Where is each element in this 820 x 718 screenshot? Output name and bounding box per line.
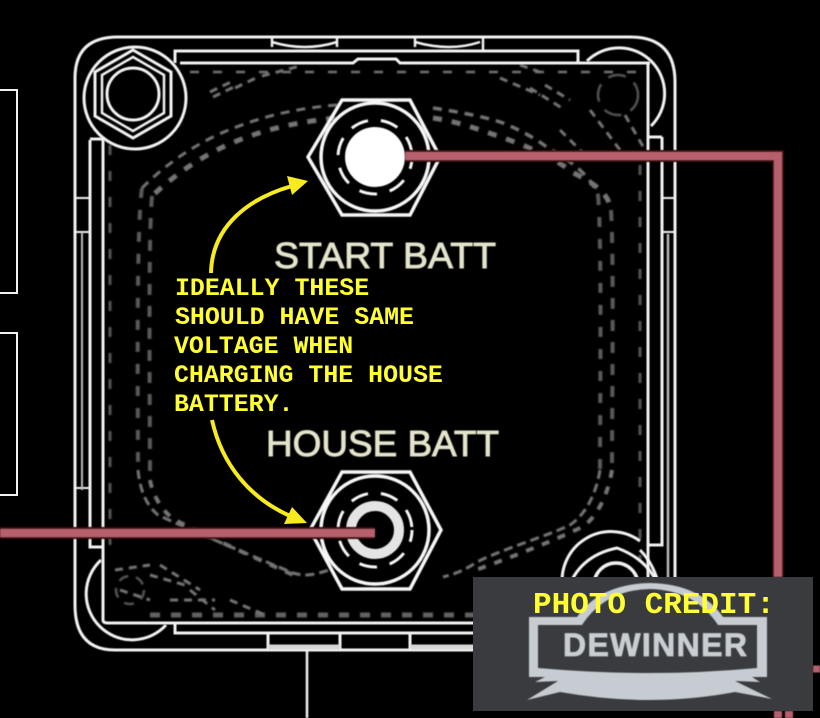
gasket dashes [110, 65, 645, 615]
yellow annotation text [174, 275, 443, 419]
red wires [0, 156, 820, 718]
photo credit text: PHOTO CREDIT: [533, 588, 775, 623]
switch body outline [75, 37, 675, 718]
side relay boxes at left edge [0, 90, 17, 495]
bottom-right mounting bolt [562, 532, 660, 592]
top-left mounting bolt [84, 47, 186, 149]
photo credit panel [473, 577, 813, 711]
yellow annotation text: BATTERY. [174, 391, 294, 419]
yellow annotation text: IDEALLY THESE [175, 275, 369, 303]
start batt label: START BATT [274, 235, 496, 276]
yellow annotation text: CHARGING THE HOUSE [174, 362, 443, 390]
house batt label: HOUSE BATT [266, 423, 499, 464]
logo frame and ribbon [527, 583, 772, 700]
top-right mounting boss [587, 48, 665, 126]
house battery terminal nut [310, 472, 441, 589]
yellow annotation text: SHOULD HAVE SAME [175, 304, 414, 332]
yellow annotation text: VOLTAGE WHEN [174, 333, 353, 361]
yellow arrow to house terminal [212, 420, 307, 524]
bottom-left mounting boss [86, 560, 166, 640]
yellow arrow to start terminal [211, 176, 308, 273]
logo name: DEWINNER [563, 627, 747, 663]
start battery terminal nut [308, 100, 440, 215]
